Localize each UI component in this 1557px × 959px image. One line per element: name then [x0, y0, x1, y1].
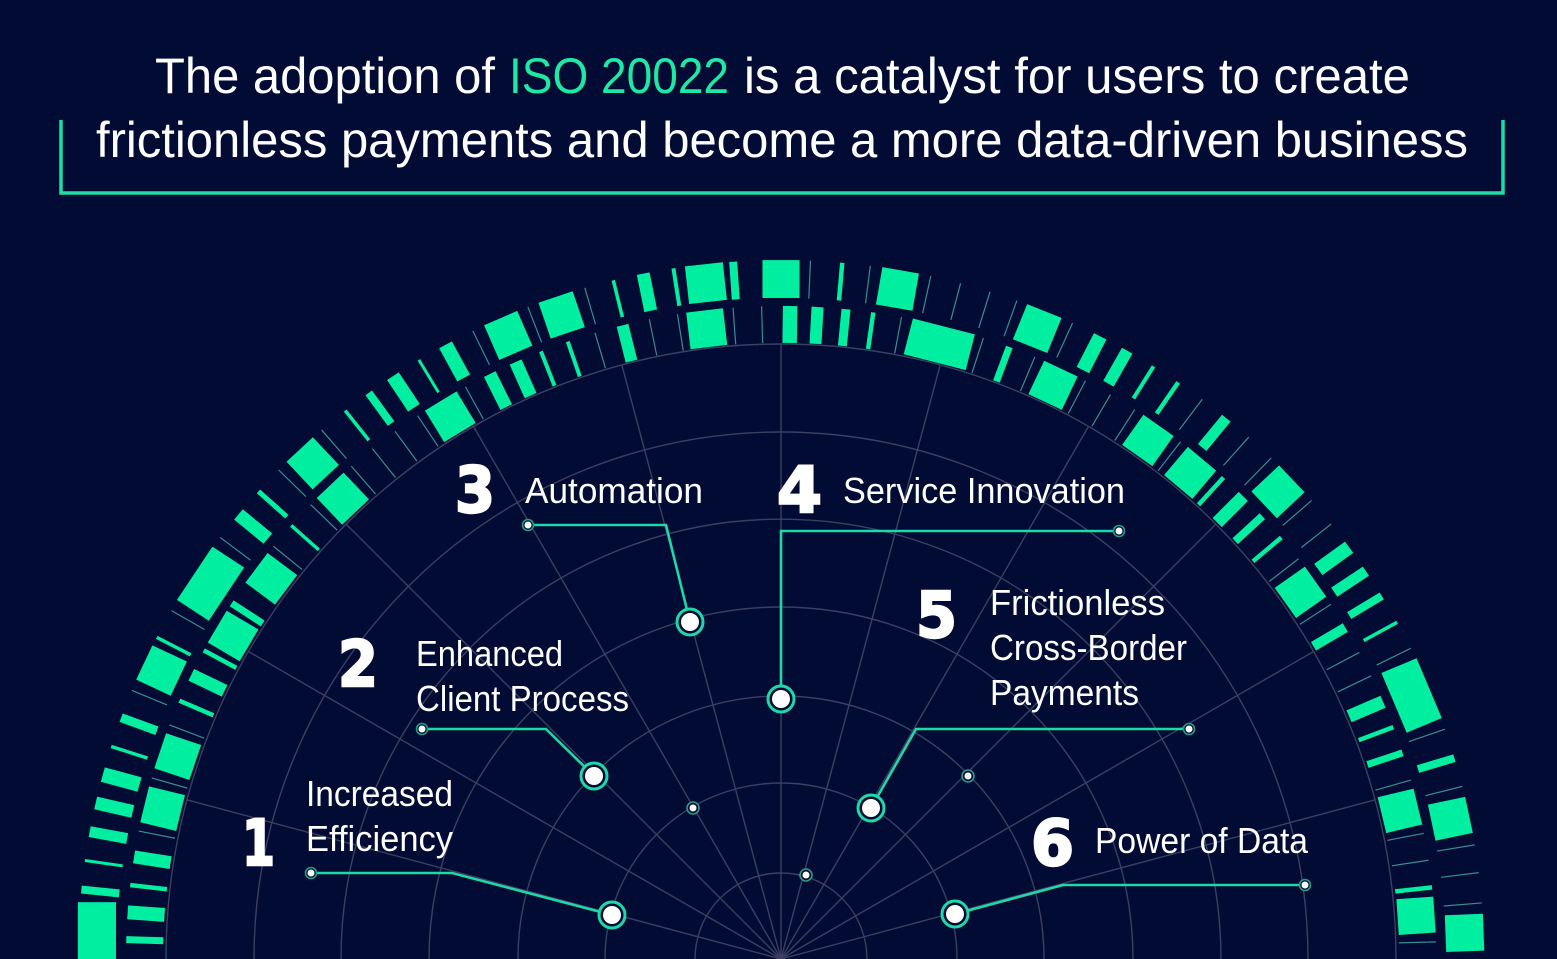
- small grid node: near centre: [800, 869, 812, 881]
- title: frictionless payments and become a more data-driven business: [96, 112, 1468, 168]
- item 2: Enhanced Client Process: [338, 628, 629, 789]
- title: ISO 20022: [509, 48, 729, 104]
- item 4: Service Innovation: [768, 454, 1125, 712]
- item 6: Power of Data: 6: [1031, 807, 1074, 880]
- item 6: Power of Data: Power of Data: [1095, 820, 1309, 861]
- title: [96, 48, 1468, 168]
- item 5: Frictionless Cross-Border Payments: [858, 579, 1194, 821]
- item 1: Increased Efficiency: Efficiency: [306, 818, 453, 859]
- item 1: Increased Efficiency: [242, 773, 625, 928]
- item 3: Automation: Automation: [525, 470, 703, 511]
- item 2: Enhanced Client Process: 2: [338, 628, 378, 701]
- outer ring data blocks: [78, 260, 1484, 959]
- item 2: Enhanced Client Process: Client Process: [416, 678, 629, 719]
- item 4: Service Innovation: Service Innovation: [843, 470, 1125, 511]
- title: is a catalyst for users to create: [744, 48, 1410, 104]
- inner ring data blocks: [126, 306, 1436, 944]
- item 3: Automation: 3: [455, 454, 495, 527]
- item 1: Increased Efficiency: 1: [242, 807, 275, 880]
- small grid node: 45 degrees right: [962, 770, 974, 782]
- item 4: Service Innovation: 4: [777, 454, 822, 527]
- item 2: Enhanced Client Process: Enhanced: [416, 633, 563, 674]
- item 3: Automation: [455, 454, 703, 635]
- item 6: Power of Data: [942, 807, 1310, 927]
- title: The adoption of: [155, 48, 495, 104]
- item 5: Frictionless Cross-Border Payments: 5: [916, 579, 957, 652]
- small grid node: 30 degrees left: [687, 802, 699, 814]
- radial grid: [166, 344, 1396, 959]
- title bracket: [61, 120, 1503, 193]
- item 5: Frictionless Cross-Border Payments: Frictionless: [990, 582, 1165, 623]
- item 1: Increased Efficiency: Increased: [306, 773, 453, 814]
- item 5: Frictionless Cross-Border Payments: Payments: [990, 672, 1139, 713]
- item 5: Frictionless Cross-Border Payments: Cross-Border: [990, 627, 1187, 668]
